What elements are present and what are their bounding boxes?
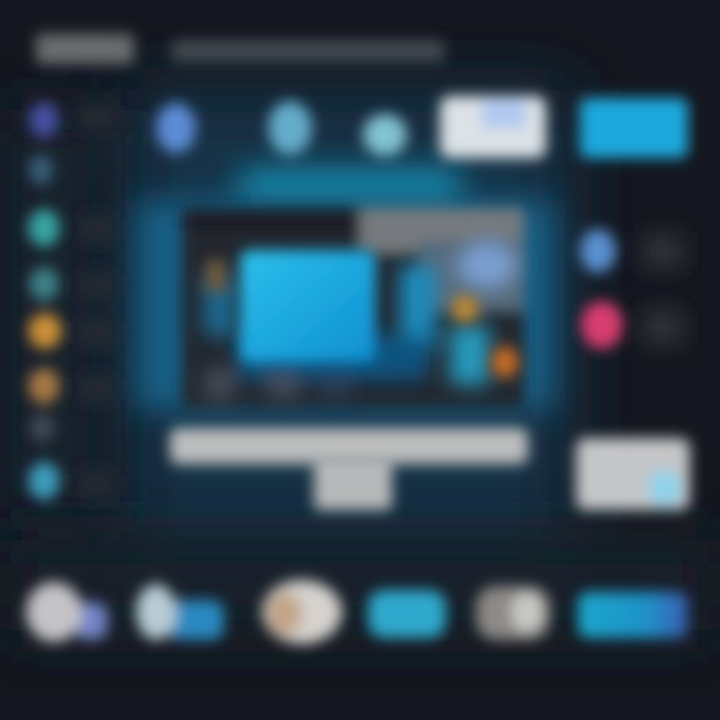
monitor base bar <box>170 428 528 464</box>
orange dots <box>206 260 519 378</box>
bottom icon 2 <box>136 584 224 640</box>
bottom icon 5 <box>476 586 550 640</box>
top card: white <box>440 96 546 158</box>
sidebar icons <box>28 102 62 500</box>
main blue panel <box>240 250 376 362</box>
background glow <box>0 90 720 630</box>
top card: blue <box>580 98 688 158</box>
sidebar labels <box>80 105 112 496</box>
bottom icon 1 <box>26 582 108 642</box>
bottom icon 3 <box>262 580 342 644</box>
subtitle <box>172 40 444 62</box>
right icons <box>580 229 623 349</box>
monitor <box>170 208 528 510</box>
top row icons <box>156 101 407 156</box>
monitor stand <box>314 456 392 510</box>
monitor screen frame <box>182 208 524 408</box>
bottom row icons <box>26 580 688 644</box>
bottom icon 4 <box>368 590 446 638</box>
right lower card <box>576 438 690 510</box>
right labels <box>642 232 684 346</box>
title <box>36 34 134 64</box>
screen details <box>204 241 517 400</box>
bottom icon 6 <box>578 592 688 638</box>
